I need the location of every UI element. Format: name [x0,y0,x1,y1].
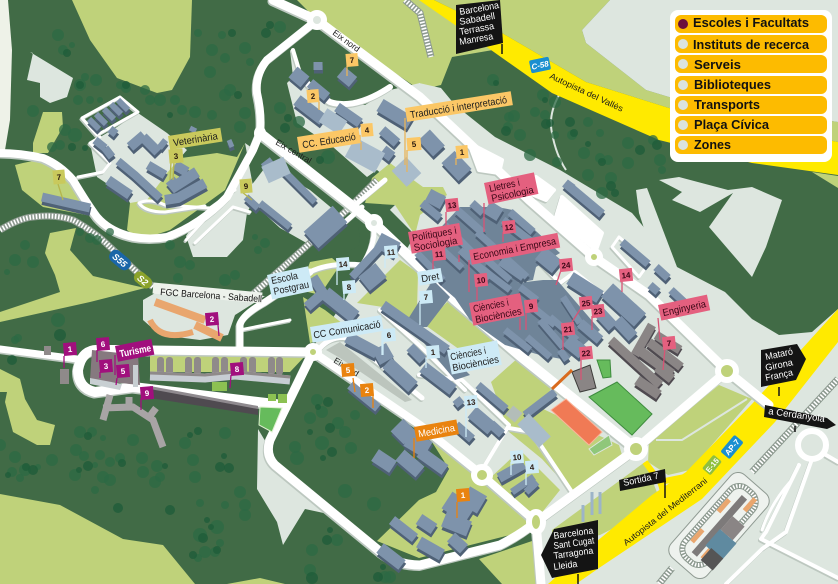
motorway: Autopista del Vallès [419,0,838,175]
label: Traducció i interpretació: Traducció i interpretació [409,95,508,121]
purple flags: Turisme: 6 [100,340,106,349]
direction sign: Barcelona Sabadell: Manresa [459,31,495,48]
label: Lletres i Psicologia [484,172,539,205]
blue flags: Communication and science: 10 [512,453,522,462]
white strip at the left edge [0,0,12,155]
campus buildings [42,62,686,568]
yellow flags: Traducció and Educació: 7 [349,56,355,65]
residence long wing [150,375,290,380]
purple flags: Turisme: 9 [144,389,150,398]
direction sign: Mataró Girona França: Girona [764,357,795,374]
yellow flags: Traducció and Educació: 2 [310,92,316,101]
label: CC. Educació: CC. Educació [302,132,357,151]
green areas inside campus [150,163,752,584]
blue flags: Communication and science: 11 [386,248,396,257]
direction sign: a Cerdanyola [764,405,836,432]
road name: Eix central: Eix central [274,137,313,166]
central slate plazas [403,207,600,380]
yellow flags: Traducció and Educació: 1 [459,148,465,157]
label: Escola Postgrau: Escola [270,271,299,287]
purple flags: Turisme: 5 [120,367,126,376]
label: Ciències i Biociències: Biociències [474,306,523,326]
label: Lletres i Psicologia: Lletres i [488,178,521,195]
station enclosure [665,468,774,583]
label: Enginyeria: Enginyeria [662,299,707,319]
blue flags: Communication and science: 4 [529,463,535,472]
label: Ciències i Biociències (blue): Ciències i [450,346,487,363]
pink flags: Social and science schools: 12 [504,222,514,232]
pink flags: Social and science schools: 14 [621,270,631,280]
pink flags: Social and science schools: 21 [563,324,573,334]
legend panel [670,10,832,162]
Turisme pale wing [90,378,122,390]
grey block by sports [572,365,596,392]
pink flags: Social and science schools: 7 [666,339,672,348]
direction sign: Barcelona Sant Cugat [541,520,598,584]
purple flags: Turisme [63,312,244,410]
label: Polítiques i Sociologia [408,223,463,255]
tree canopy [0,21,666,583]
pink flags: Social and science schools: 24 [561,260,571,270]
checkered pavilion [506,406,522,422]
label: CC Comunicació: CC Comunicació [313,319,382,341]
legend panel: Biblioteques [694,78,771,92]
dark long building [150,387,258,415]
pink flags: Social and science schools: 13 [447,200,457,210]
motorway name: Mediterrani: Autopista del Mediterrani [621,476,709,548]
roundabouts [257,13,826,532]
FGC station [150,302,222,338]
pink flags: Social and science schools: 9 [528,302,534,311]
label: Ciències i Biociències (blue) [447,340,502,375]
direction sign: Barcelona Sant Cugat: Tarragona [553,545,595,562]
badge: C-58: C-58 [531,59,550,72]
purple flags: Turisme: 3 [103,362,109,371]
olive flags: Veterinària [52,148,253,200]
direction sign: Sortida 7 [619,469,666,498]
direction sign: Barcelona Sant Cugat: Lleida [553,559,579,573]
direction sign: a Cerdanyola: a Cerdanyola [768,406,826,425]
orange flags: Medicina: 1 [460,491,466,500]
label: Medicina: Medicina [417,423,456,440]
orange flags: Medicina: 5 [345,366,351,375]
blue flags: Communication and science: 1 [430,348,436,357]
hotel building [103,395,163,447]
blue flags: Communication and science: 6 [386,331,392,340]
label: Polítiques i Sociologia: Sociologia [413,236,459,254]
legend panel: Zones [694,138,731,152]
direction sign: Sortida 7: Sortida 7 [622,471,660,489]
pink flags: Social and science schools: 11 [434,250,444,259]
olive flags: Veterinària: 9 [243,182,249,191]
yellow flags: Traducció and Educació: 4 [364,126,370,135]
residence rounded blocks [157,357,283,375]
purple flags: Turisme: 1 [67,345,73,354]
direction sign: Mataró Girona França [761,344,806,396]
motorway name: Vallès: Autopista del Vallès [548,71,625,114]
darker trees [5,21,662,584]
legend panel: Instituts de recerca [693,38,810,52]
legend panel: Transports [694,98,760,112]
direction sign: Barcelona Sant Cugat: Barcelona [553,525,595,542]
badge: E-15: E-15 [704,456,721,474]
label: Escola Postgrau [267,266,313,299]
direction sign: Mataró Girona França: Mataró [764,346,794,363]
label: Dret [417,268,443,286]
road name: Eix sud: Eix sud [332,355,361,379]
slim towers [583,492,600,522]
orange flags: Medicina: 2 [364,386,370,395]
blue flags: Communication and science: 14 [338,260,348,269]
label: Polítiques i Sociologia: Polítiques i [411,226,458,244]
orange flags: Medicina [341,363,470,518]
direction sign: Barcelona Sabadell: Sabadell [459,11,496,28]
pink flags: Social and science schools: 10 [476,275,486,285]
purple flags: Turisme: 2 [209,315,215,324]
label: Ciències i Biociències (blue): Biociències [452,354,500,374]
sports courts [212,360,652,455]
badge: S2 [131,269,155,291]
badge: C-58 [529,57,551,73]
footpaths [551,95,747,440]
forest remnants inside campus [245,200,502,584]
pink flags: Social and science schools [432,198,676,380]
rail name: FGC Barcelona - Sabadell [160,287,262,305]
badge: S55: S55 [110,251,130,270]
pink flags: Social and science schools: 22 [581,348,591,358]
Engineering school buildings [611,325,681,398]
label: Escola Postgrau: Postgrau [273,280,310,298]
small chapel buildings [44,346,138,387]
direction sign: Mataró Girona França: França [764,367,795,384]
FGC station band [153,288,262,298]
olive flags: Veterinària: 3 [173,152,179,161]
label: Lletres i Psicologia: Psicologia [490,185,535,205]
badge: S55 [107,247,133,273]
blue flags: Communication and science: 7 [423,293,429,302]
direction sign: Barcelona Sabadell: Terrassa [459,21,496,38]
Turisme area ground building [90,350,140,385]
direction sign: Barcelona Sabadell: Barcelona [459,0,501,18]
badge: AP-7: AP-7 [723,437,742,457]
badge: S2: S2 [135,273,150,288]
motorway slip road [645,462,690,515]
label: Dret: Dret [420,271,440,285]
blue flags: Communication and science: 8 [346,283,352,292]
blue flags: Communication and science: 13 [466,398,476,407]
direction sign: Barcelona Sant Cugat: Sant Cugat [553,535,595,552]
label: Economia i Empresa: Economia i Empresa [473,236,557,263]
blue flags: Communication and science [336,245,539,485]
legend panel: Escoles i Facultats [693,16,809,30]
pink flags: Social and science schools: 23 [593,306,603,316]
yellow flags: Traducció and Educació [306,53,469,172]
legend panel: Plaça Cívica [694,118,770,132]
road name: Eix nord: Eix nord [331,28,362,54]
pink flags: Social and science schools: 25 [581,298,591,308]
label: Veterinària: Veterinària [172,131,219,149]
label: Turisme [115,339,154,362]
orange footbridge [552,370,572,389]
legend panel: Serveis [694,58,741,72]
grey verge strip [326,342,412,402]
label: Ciències i Biociències: Ciències i [472,298,510,315]
purple flags: Turisme: 8 [234,365,240,374]
label: Ciències i Biociències [469,293,525,327]
badge: AP-7 [720,435,744,459]
olive flags: Veterinària: 7 [56,173,62,182]
yellow flags: Traducció and Educació: 5 [411,140,417,149]
label: Turisme: Turisme [119,343,153,360]
pale glass buildings [265,115,545,442]
direction sign: Barcelona Sabadell [456,0,503,54]
motorway: Autopista del Mediterrani [548,309,838,584]
